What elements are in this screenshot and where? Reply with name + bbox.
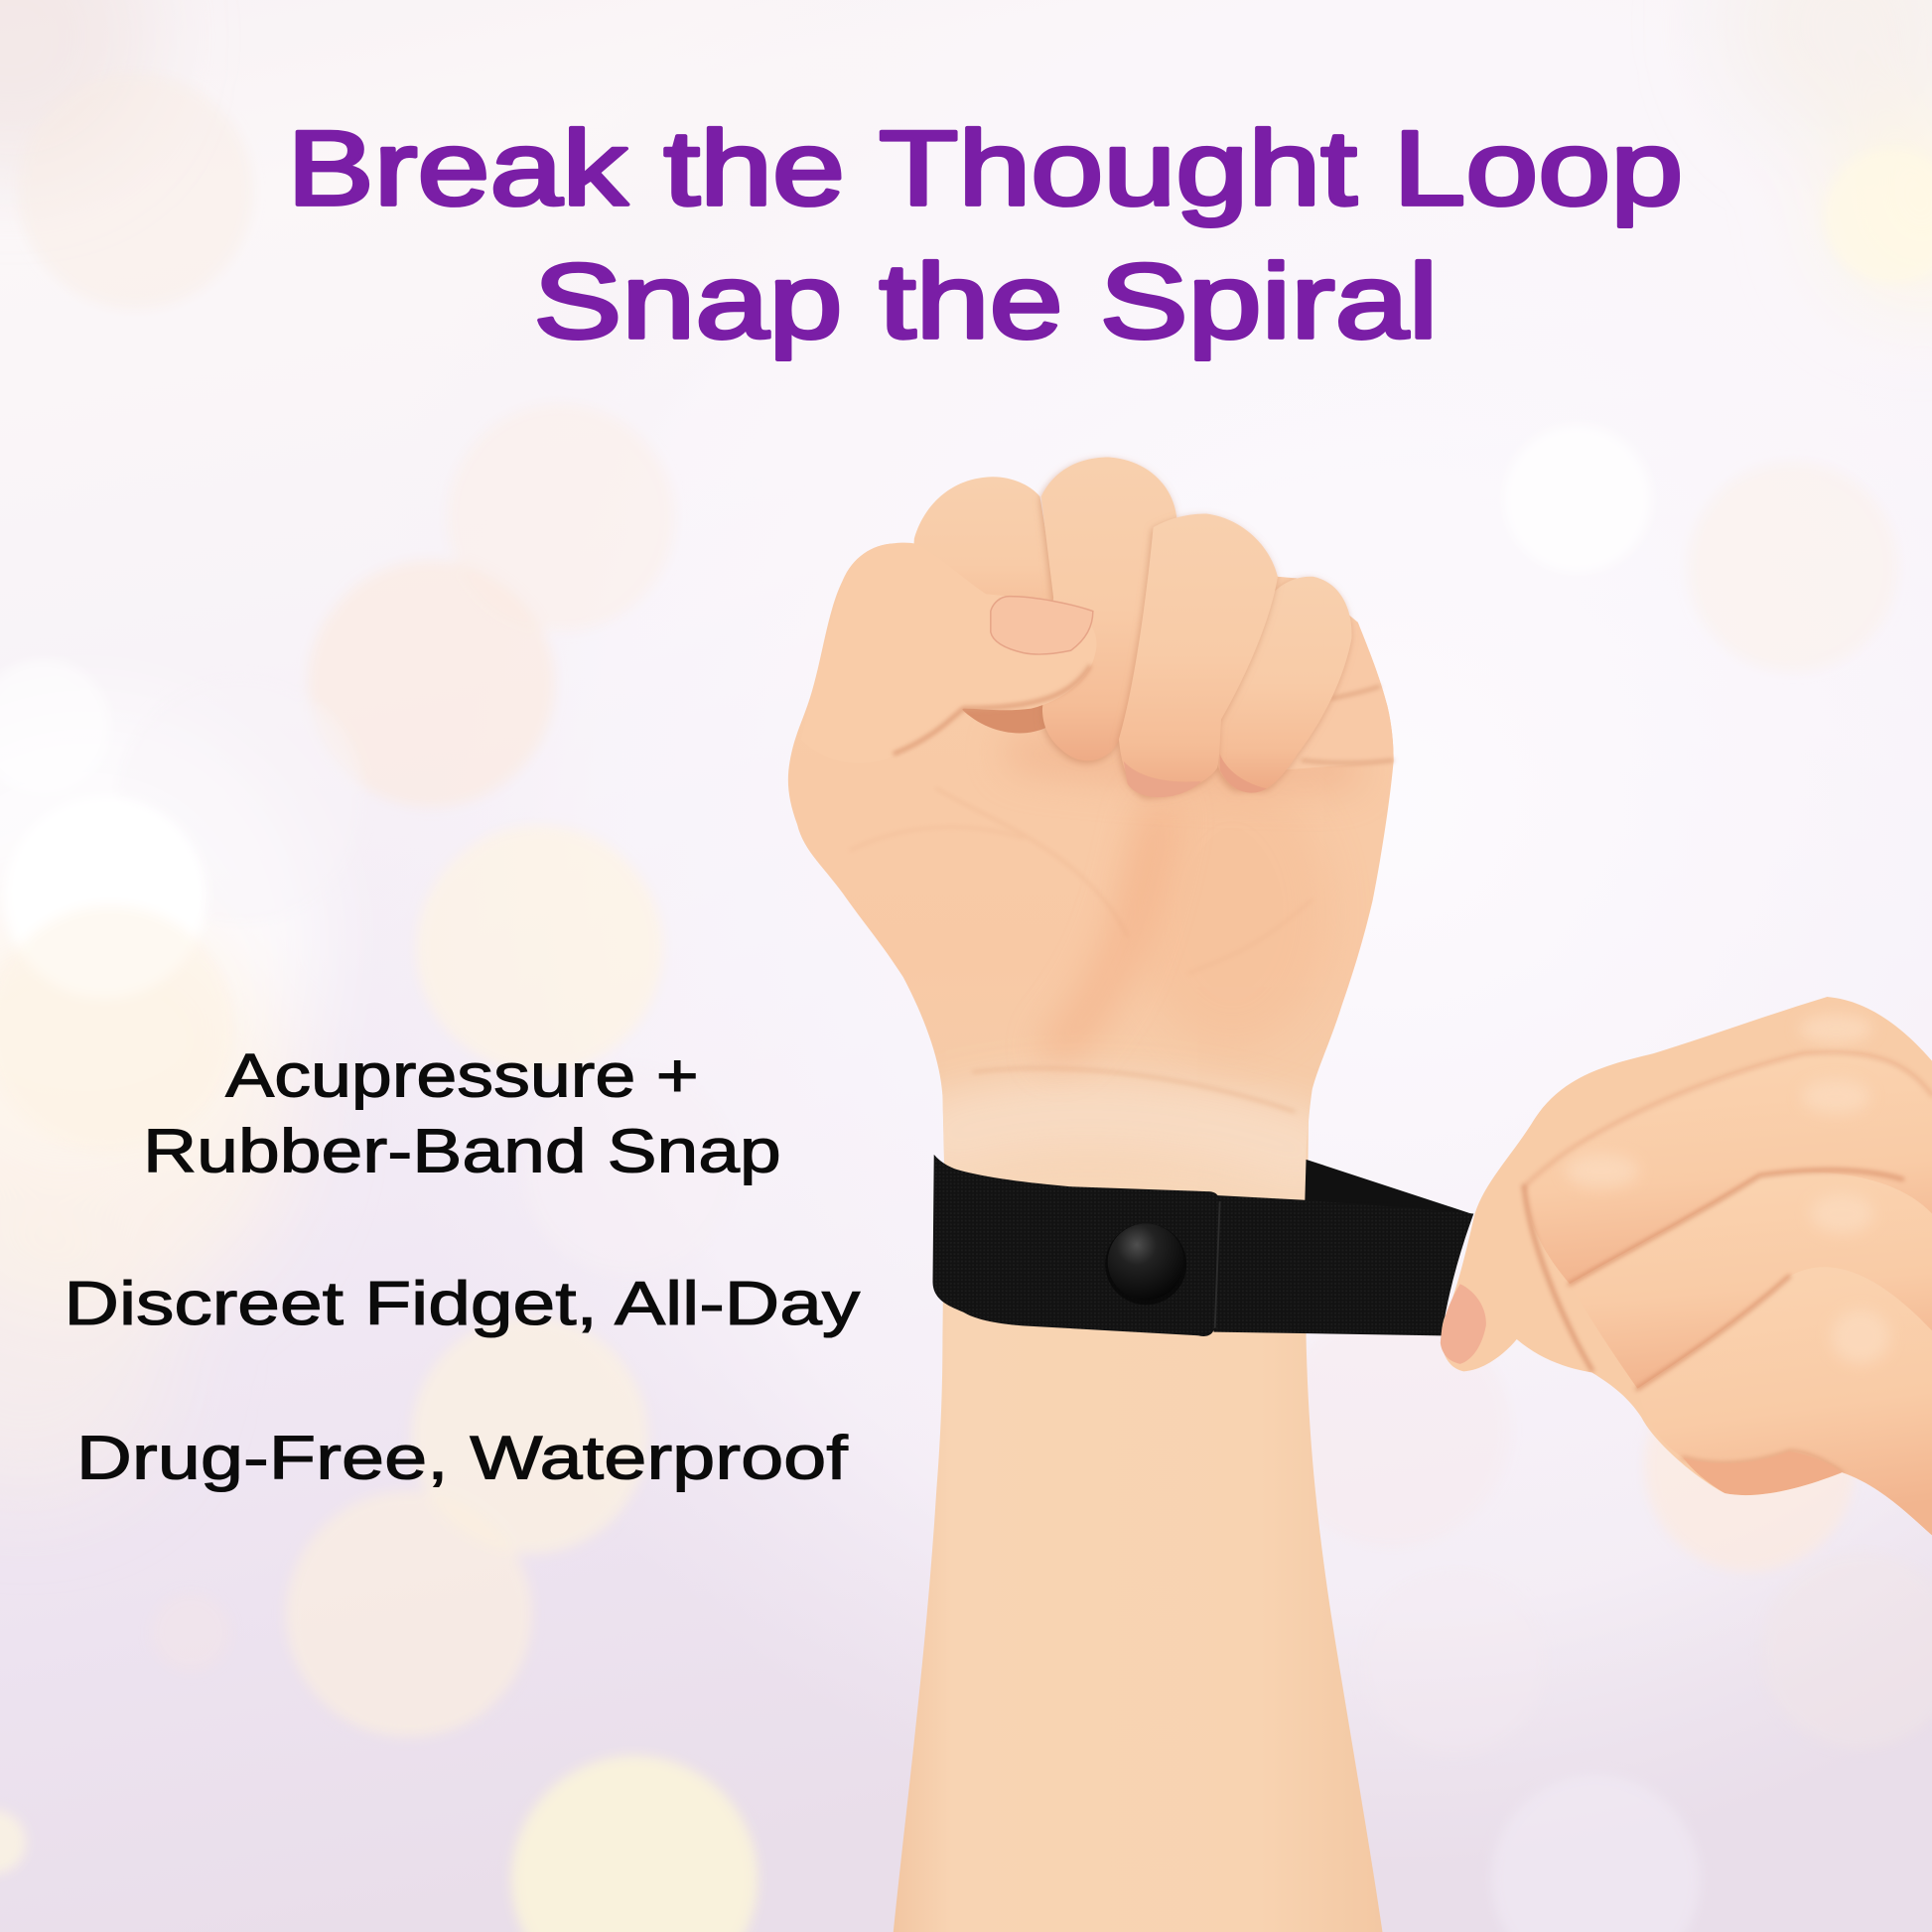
hidden finger fold [961, 702, 1047, 733]
thumb nail [1441, 1284, 1486, 1364]
ring finger [1119, 514, 1278, 796]
benefits text block: Acupressure + [225, 1042, 699, 1111]
little finger [1217, 577, 1352, 788]
hand silhouette [1442, 997, 1932, 1535]
raised arm with clenched fist [788, 457, 1394, 1932]
benefits text block: Rubber-Band Snap [143, 1117, 781, 1185]
thumb nail [991, 597, 1093, 654]
title: Snap the Spiral [533, 241, 1438, 360]
benefits text block: Drug-Free, Waterproof [76, 1424, 849, 1492]
benefits text block [65, 1042, 860, 1492]
palm and wrist shading [850, 752, 1343, 1152]
thumb crease [894, 665, 1090, 755]
wristband [932, 1155, 1473, 1336]
forearm [894, 1109, 1382, 1932]
metal snap button [1105, 1223, 1186, 1305]
fingertip pads [1220, 755, 1267, 793]
underside of little finger [1683, 1451, 1842, 1495]
palm and back of fist [788, 543, 1394, 1201]
little finger base [1282, 622, 1394, 770]
rear strap [1305, 1160, 1471, 1213]
middle finger [1041, 457, 1176, 760]
pulled strap [1213, 1195, 1473, 1335]
index finger [911, 477, 1059, 653]
fingers clipped to hand [1524, 1014, 1932, 1535]
title [287, 108, 1683, 360]
knuckle highlights [1565, 1014, 1890, 1364]
snap flap [932, 1155, 1220, 1336]
thumb [801, 543, 1097, 762]
second hand pulling the band [1441, 997, 1932, 1535]
title: Break the Thought Loop [287, 108, 1683, 227]
benefits text block: Discreet Fidget, All-Day [65, 1270, 860, 1338]
